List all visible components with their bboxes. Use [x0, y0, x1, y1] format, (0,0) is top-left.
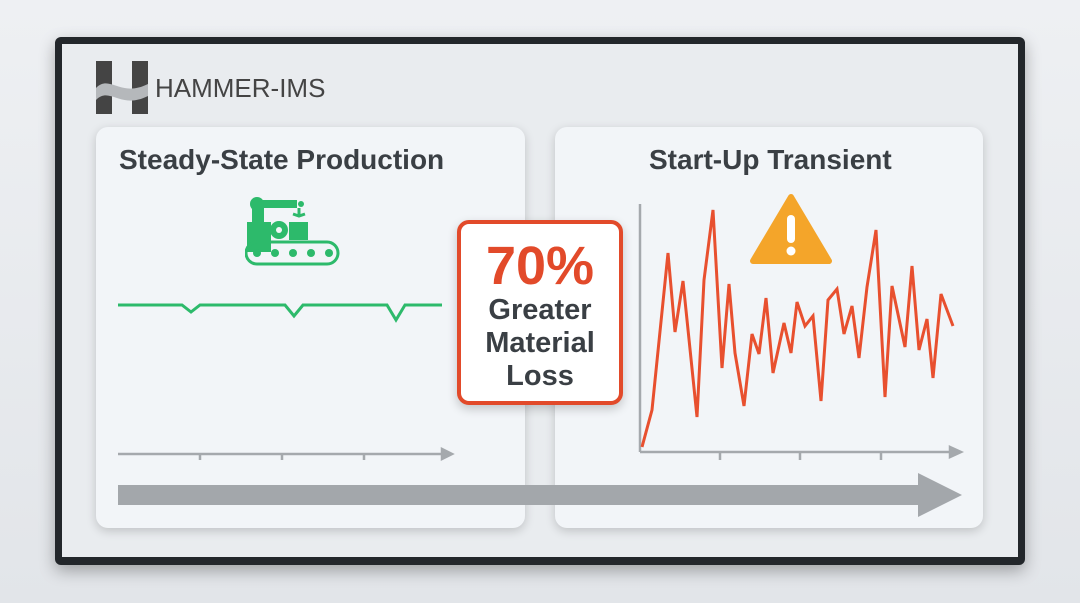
callout: 70%: 70%	[486, 236, 594, 296]
callout: 70%: Loss	[506, 360, 574, 392]
panel: steady-state	[96, 127, 525, 528]
callout: 70%	[457, 220, 623, 405]
logo: HAMMER-IMS	[155, 73, 325, 103]
icon: warning	[750, 194, 832, 264]
callout: 70%: Greater	[488, 294, 592, 326]
panel: start-up	[555, 127, 983, 528]
arrow: timeline	[118, 473, 962, 517]
monitor frame	[55, 37, 1025, 565]
heading: steady-state: Steady-State Production	[119, 144, 444, 175]
logo	[96, 61, 325, 114]
icon: robot conveyor	[245, 197, 340, 266]
callout: 70%: Material	[485, 327, 595, 359]
heading: start-up: Start-Up Transient	[649, 144, 892, 175]
